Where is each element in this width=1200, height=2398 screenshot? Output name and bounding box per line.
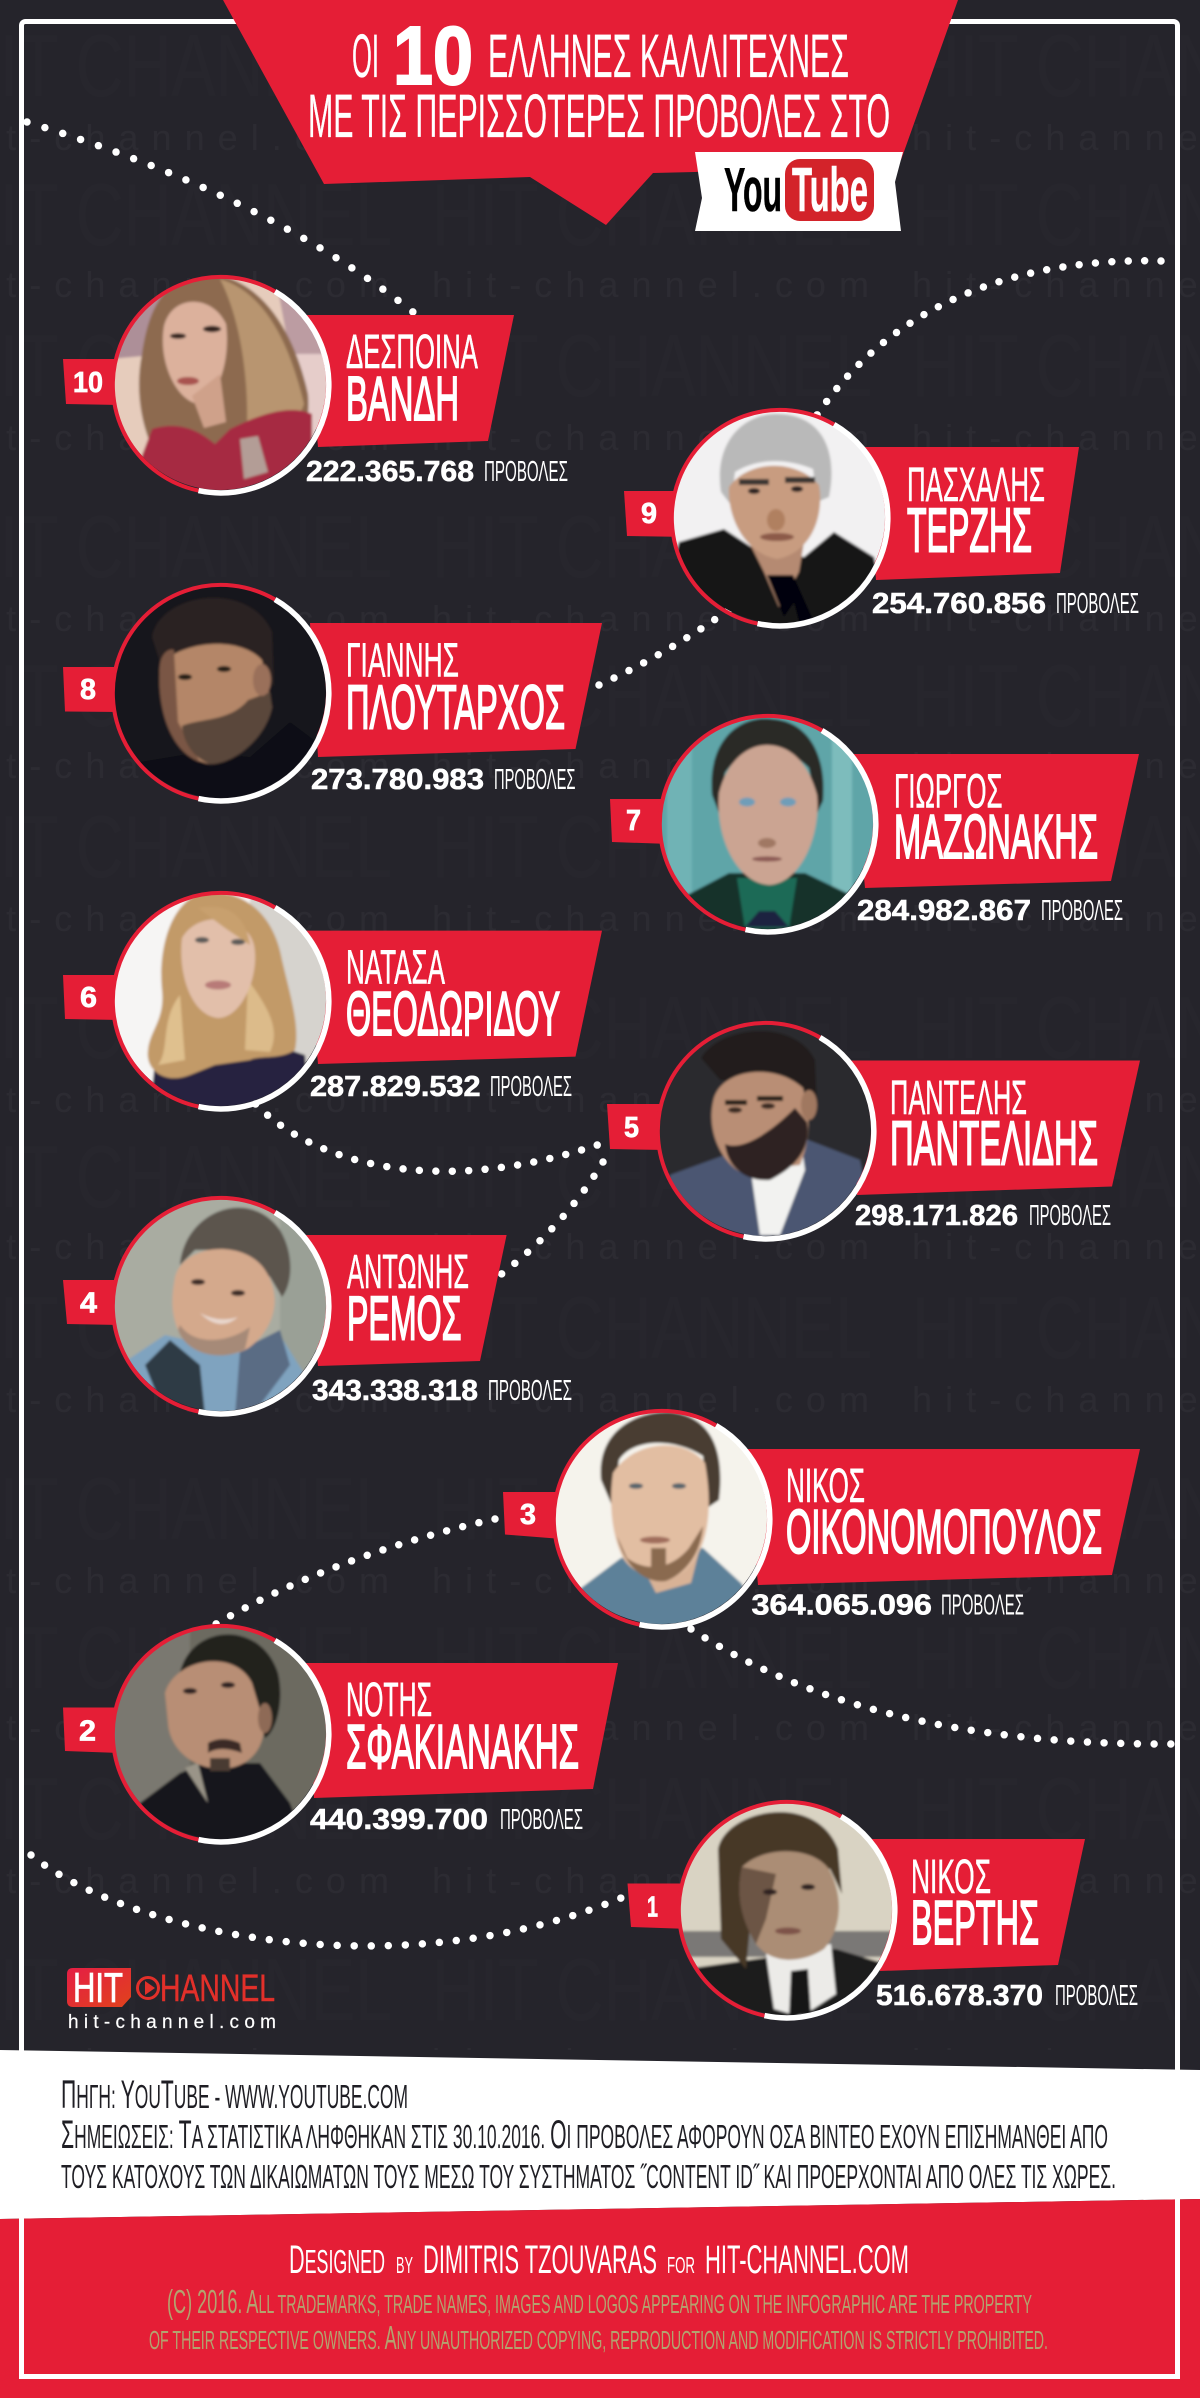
rank tag: 8 — [80, 674, 96, 706]
rank tag — [628, 1884, 690, 1929]
views: ΠΡΟΒΟΛΕΣ — [941, 1590, 1024, 1622]
views — [752, 1590, 1024, 1622]
views: 364.065.096 — [752, 1590, 932, 1622]
rank tag — [503, 1492, 562, 1539]
credits panel — [0, 2199, 1200, 2398]
name — [907, 459, 1045, 566]
rank tag: 5 — [624, 1112, 639, 1144]
name: ΘΕΟΔΩΡΙΔΟΥ — [346, 979, 560, 1049]
artist 10: Δέσποινα Βανδή — [63, 274, 568, 494]
title text — [308, 9, 890, 150]
views: ΠΡΟΒΟΛΕΣ — [490, 1071, 572, 1103]
views: 273.780.983 — [311, 764, 484, 796]
views: 287.829.532 — [310, 1071, 481, 1103]
ribbon — [849, 1060, 1140, 1195]
YouTube logo: You — [724, 156, 782, 225]
portrait — [676, 1799, 896, 2019]
ribbon — [306, 1235, 507, 1366]
name: ΓΙΩΡΓΟΣ — [894, 766, 1002, 818]
rank tag — [63, 1280, 120, 1325]
rank tag: 9 — [641, 498, 657, 530]
Hit Channel logo — [67, 1964, 276, 2033]
views: 516.678.370 — [876, 1980, 1043, 2012]
name: ΡΕΜΟΣ — [347, 1284, 462, 1354]
name: ΑΝΤΩΝΗΣ — [347, 1246, 469, 1299]
rank tag: 4 — [80, 1288, 97, 1320]
rank tag: 1 — [647, 1892, 658, 1924]
Hit Channel logo: hit-channel.com — [68, 2012, 276, 2033]
rank tag: 10 — [73, 367, 103, 399]
designer credit: FOR — [667, 2252, 695, 2278]
portrait — [551, 1408, 771, 1628]
artist 5: Παντελής Παντελίδης — [607, 1020, 1140, 1240]
views: ΠΡΟΒΟΛΕΣ — [1029, 1200, 1111, 1232]
designer credit: HIT-CHANNEL.COM — [705, 2238, 909, 2282]
views: 343.338.318 — [312, 1375, 478, 1407]
name: ΓΙΑΝΝΗΣ — [346, 635, 459, 688]
rank tag — [63, 1708, 120, 1753]
YouTube logo — [695, 152, 903, 231]
views — [310, 1071, 572, 1103]
portrait — [657, 713, 877, 933]
portrait — [669, 407, 889, 627]
rank tag — [610, 799, 670, 844]
rank tag — [63, 667, 120, 712]
YouTube logo: Tube — [792, 156, 868, 225]
rank tag: 6 — [80, 982, 97, 1014]
portrait — [110, 582, 330, 802]
name: ΔΕΣΠΟΙΝΑ — [346, 326, 478, 379]
source and notes panel — [0, 2050, 1200, 2219]
title text: ΕΛΛΗΝΕΣ ΚΑΛΛΙΤΕΧΝΕΣ — [488, 22, 849, 90]
ribbon — [310, 623, 602, 757]
designer credit: DIMITRIS TZOUVARAS — [423, 2238, 657, 2282]
name: ΠΑΣΧΑΛΗΣ — [907, 459, 1045, 512]
portrait — [110, 1623, 330, 1843]
name — [786, 1460, 1102, 1567]
name — [894, 766, 1098, 872]
views: ΠΡΟΒΟΛΕΣ — [1041, 895, 1123, 927]
name: ΝΙΚΟΣ — [786, 1460, 865, 1513]
artist 6: Νατάσα Θεοδωρίδου — [63, 890, 602, 1110]
views: 298.171.826 — [855, 1200, 1018, 1232]
name: ΝΑΤΑΣΑ — [346, 941, 445, 994]
name: ΒΑΝΔΗ — [346, 364, 459, 434]
artist 9: Πασχάλης Τερζής — [624, 407, 1139, 627]
banner shape — [223, 0, 958, 225]
views: 254.760.856 — [872, 588, 1046, 620]
ribbon — [865, 447, 1079, 580]
rank tag: 7 — [626, 805, 641, 837]
views — [310, 1804, 583, 1836]
views — [312, 1375, 572, 1407]
rank tag — [63, 975, 120, 1020]
views — [306, 456, 568, 488]
designer credit: DESIGNED — [289, 2238, 385, 2282]
artist 1: Νίκος Βέρτης — [628, 1799, 1138, 2019]
views: ΠΡΟΒΟΛΕΣ — [488, 1375, 572, 1407]
name — [346, 1674, 579, 1782]
dotted connector lines — [27, 122, 1171, 1946]
artist 4: Αντώνης Ρέμος — [63, 1195, 572, 1415]
artist 8: Γιάννης Πλούταρχος — [63, 582, 602, 802]
rank tag — [607, 1104, 665, 1150]
name: ΝΟΤΗΣ — [346, 1674, 432, 1727]
views: ΠΡΟΒΟΛΕΣ — [484, 456, 568, 488]
views: 222.365.768 — [306, 456, 474, 488]
Hit Channel logo: HANNEL — [160, 1968, 275, 2010]
name — [890, 1072, 1098, 1179]
name: ΠΛΟΥΤΑΡΧΟΣ — [346, 672, 565, 742]
name: ΒΕΡΤΗΣ — [911, 1888, 1039, 1958]
name: ΠΑΝΤΕΛΗΣ — [890, 1072, 1027, 1125]
views — [876, 1980, 1138, 2012]
views — [872, 588, 1139, 620]
designer credit: BY — [396, 2252, 413, 2278]
title text: ΟΙ — [352, 22, 379, 90]
name: ΣΦΑΚΙΑΝΑΚΗΣ — [346, 1712, 579, 1782]
designer credit — [289, 2238, 909, 2282]
name — [911, 1851, 1039, 1958]
artist 2: Νότης Σφακιανάκης — [63, 1623, 618, 1843]
source line: ΠΗΓΗ: YOUTUBE - WWW.YOUTUBE.COM — [61, 2073, 408, 2117]
artist 3: Νίκος Οικονομόπουλος — [503, 1408, 1140, 1628]
artist 7: Γιώργος Μαζωνάκης — [610, 713, 1139, 933]
name: ΤΕΡΖΗΣ — [907, 496, 1032, 566]
ribbon — [306, 1663, 618, 1798]
Hit Channel logo: HIT — [73, 1964, 123, 2011]
name — [346, 941, 560, 1049]
ribbon — [306, 315, 514, 447]
name — [346, 326, 478, 434]
rank tag: 2 — [79, 1716, 96, 1748]
views — [857, 895, 1123, 927]
name — [347, 1246, 469, 1354]
rank tag — [624, 491, 690, 537]
portrait — [110, 274, 330, 494]
name: ΝΙΚΟΣ — [911, 1851, 991, 1904]
ribbon — [853, 754, 1139, 888]
title text: 10 — [393, 9, 473, 102]
views: 440.399.700 — [310, 1804, 488, 1836]
ribbon — [869, 1839, 1085, 1971]
portrait — [110, 1195, 330, 1415]
views — [311, 764, 576, 796]
rank tag — [63, 359, 120, 405]
portrait — [110, 890, 330, 1110]
title banner — [223, 0, 958, 231]
name — [346, 635, 565, 742]
ribbon — [746, 1449, 1140, 1585]
views: ΠΡΟΒΟΛΕΣ — [494, 764, 576, 796]
views: ΠΡΟΒΟΛΕΣ — [500, 1804, 583, 1836]
rank tag: 3 — [520, 1499, 536, 1531]
portrait — [655, 1020, 875, 1240]
ribbon — [306, 931, 602, 1064]
views — [855, 1200, 1111, 1232]
views: 284.982.867 — [857, 895, 1031, 927]
